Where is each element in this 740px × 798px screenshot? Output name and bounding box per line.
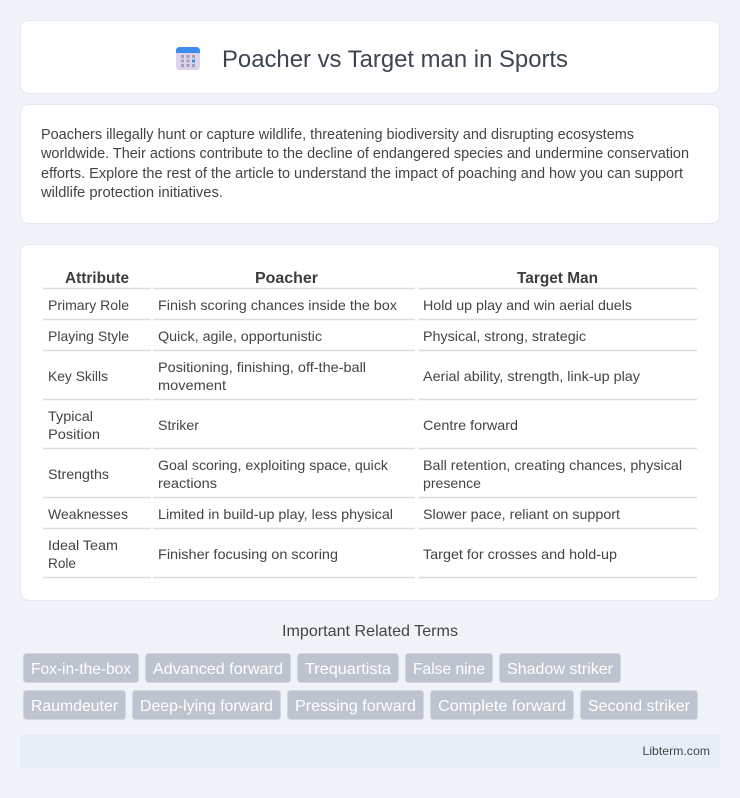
- tag: Second striker: [580, 690, 698, 720]
- footer credit: Libterm.com: [642, 744, 710, 758]
- tag: Shadow striker: Shadow striker: [507, 661, 614, 678]
- row: primary role: Hold up play and win aerial duels: [423, 297, 632, 313]
- row: strengths: Ball retention, creating chances, physical: [423, 457, 682, 473]
- tag: Advanced forward: Advanced forward: [153, 661, 283, 678]
- row: strengths: Goal scoring, exploiting space, quick: [158, 457, 389, 473]
- row: ideal team role: Target for crosses and hold-up: [423, 546, 617, 562]
- table header row: Target Man: [517, 270, 598, 287]
- row: ideal team role: Ideal Team: [48, 537, 118, 553]
- title: Poacher vs Target man in Sports: [222, 46, 568, 73]
- row: weaknesses: Limited in build-up play, less physical: [158, 506, 393, 522]
- intro text: efforts. Explore the rest of the article to understand the impact of poaching and how you can support: [41, 166, 683, 182]
- row: key skills: Aerial ability, strength, link-up play: [423, 368, 640, 384]
- intro text: Poachers illegally hunt or capture wildlife, threatening biodiversity and disrupting ecosystems: [41, 127, 634, 143]
- row: primary role: Primary Role: [48, 297, 129, 313]
- row: key skills: [48, 359, 640, 393]
- row: playing style: Playing Style: [48, 328, 129, 344]
- row: typical position: Typical: [48, 408, 93, 424]
- row: weaknesses: Slower pace, reliant on support: [423, 506, 620, 522]
- row: typical position: [48, 408, 518, 442]
- tag: Second striker: Second striker: [588, 698, 691, 715]
- intro text: worldwide. Their actions contribute to the decline of endangered species and undermine conservation: [40, 146, 689, 162]
- tag: Complete forward: [430, 690, 574, 720]
- tag: Fox-in-the-box: Fox-in-the-box: [31, 661, 131, 678]
- tag: Fox-in-the-box: [24, 654, 138, 682]
- heading: important related terms: Important Related Terms: [282, 623, 458, 640]
- row: strengths: presence: [423, 475, 481, 491]
- row: primary role: Finish scoring chances inside the box: [158, 297, 397, 313]
- row: typical position: Striker: [158, 417, 199, 433]
- intro text: [40, 127, 689, 201]
- row: strengths: [48, 457, 682, 491]
- tag: Pressing forward: [288, 690, 424, 720]
- tag: Advanced forward: [146, 654, 290, 682]
- intro text: wildlife protection initiatives.: [40, 185, 223, 201]
- table header row: [65, 270, 598, 287]
- tag: Trequartista: [298, 654, 398, 682]
- panel: introduction: [20, 104, 720, 224]
- row: strengths: reactions: [158, 475, 217, 491]
- footer: [20, 735, 720, 768]
- row: playing style: Quick, agile, opportunistic: [158, 328, 322, 344]
- panel: header: [20, 20, 720, 94]
- tag: Deep-lying forward: Deep-lying forward: [140, 698, 273, 715]
- row: playing style: [48, 328, 586, 344]
- row: ideal team role: Finisher focusing on scoring: [158, 546, 338, 562]
- icon: calendar: [176, 47, 200, 70]
- table header row: Attribute: [65, 270, 129, 287]
- row: strengths: Strengths: [48, 466, 109, 482]
- row: weaknesses: [48, 506, 620, 522]
- row: ideal team role: [48, 537, 617, 571]
- tag: Raumdeuter: [24, 690, 126, 720]
- row: key skills: Positioning, finishing, off-the-ball: [158, 359, 366, 375]
- tag: Shadow striker: [500, 654, 620, 682]
- row: key skills: movement: [158, 377, 226, 393]
- tag: Pressing forward: Pressing forward: [295, 698, 416, 715]
- row: typical position: Centre forward: [423, 417, 518, 433]
- row: key skills: Key Skills: [48, 368, 108, 384]
- tag: Deep-lying forward: [132, 690, 280, 720]
- tag: False nine: [406, 654, 492, 682]
- table header row: Poacher: [255, 270, 318, 287]
- row: typical position: Position: [48, 426, 100, 442]
- tag: Trequartista: Trequartista: [305, 661, 391, 678]
- related term tags: [24, 654, 698, 720]
- row: playing style: Physical, strong, strategic: [423, 328, 586, 344]
- tag: False nine: False nine: [413, 661, 485, 678]
- tag: Raumdeuter: Raumdeuter: [31, 698, 119, 715]
- panel: comparison table: [20, 244, 720, 600]
- tag: Complete forward: Complete forward: [438, 698, 566, 715]
- row: primary role: [48, 297, 632, 313]
- row: ideal team role: Role: [48, 555, 76, 571]
- row: weaknesses: Weaknesses: [48, 506, 128, 522]
